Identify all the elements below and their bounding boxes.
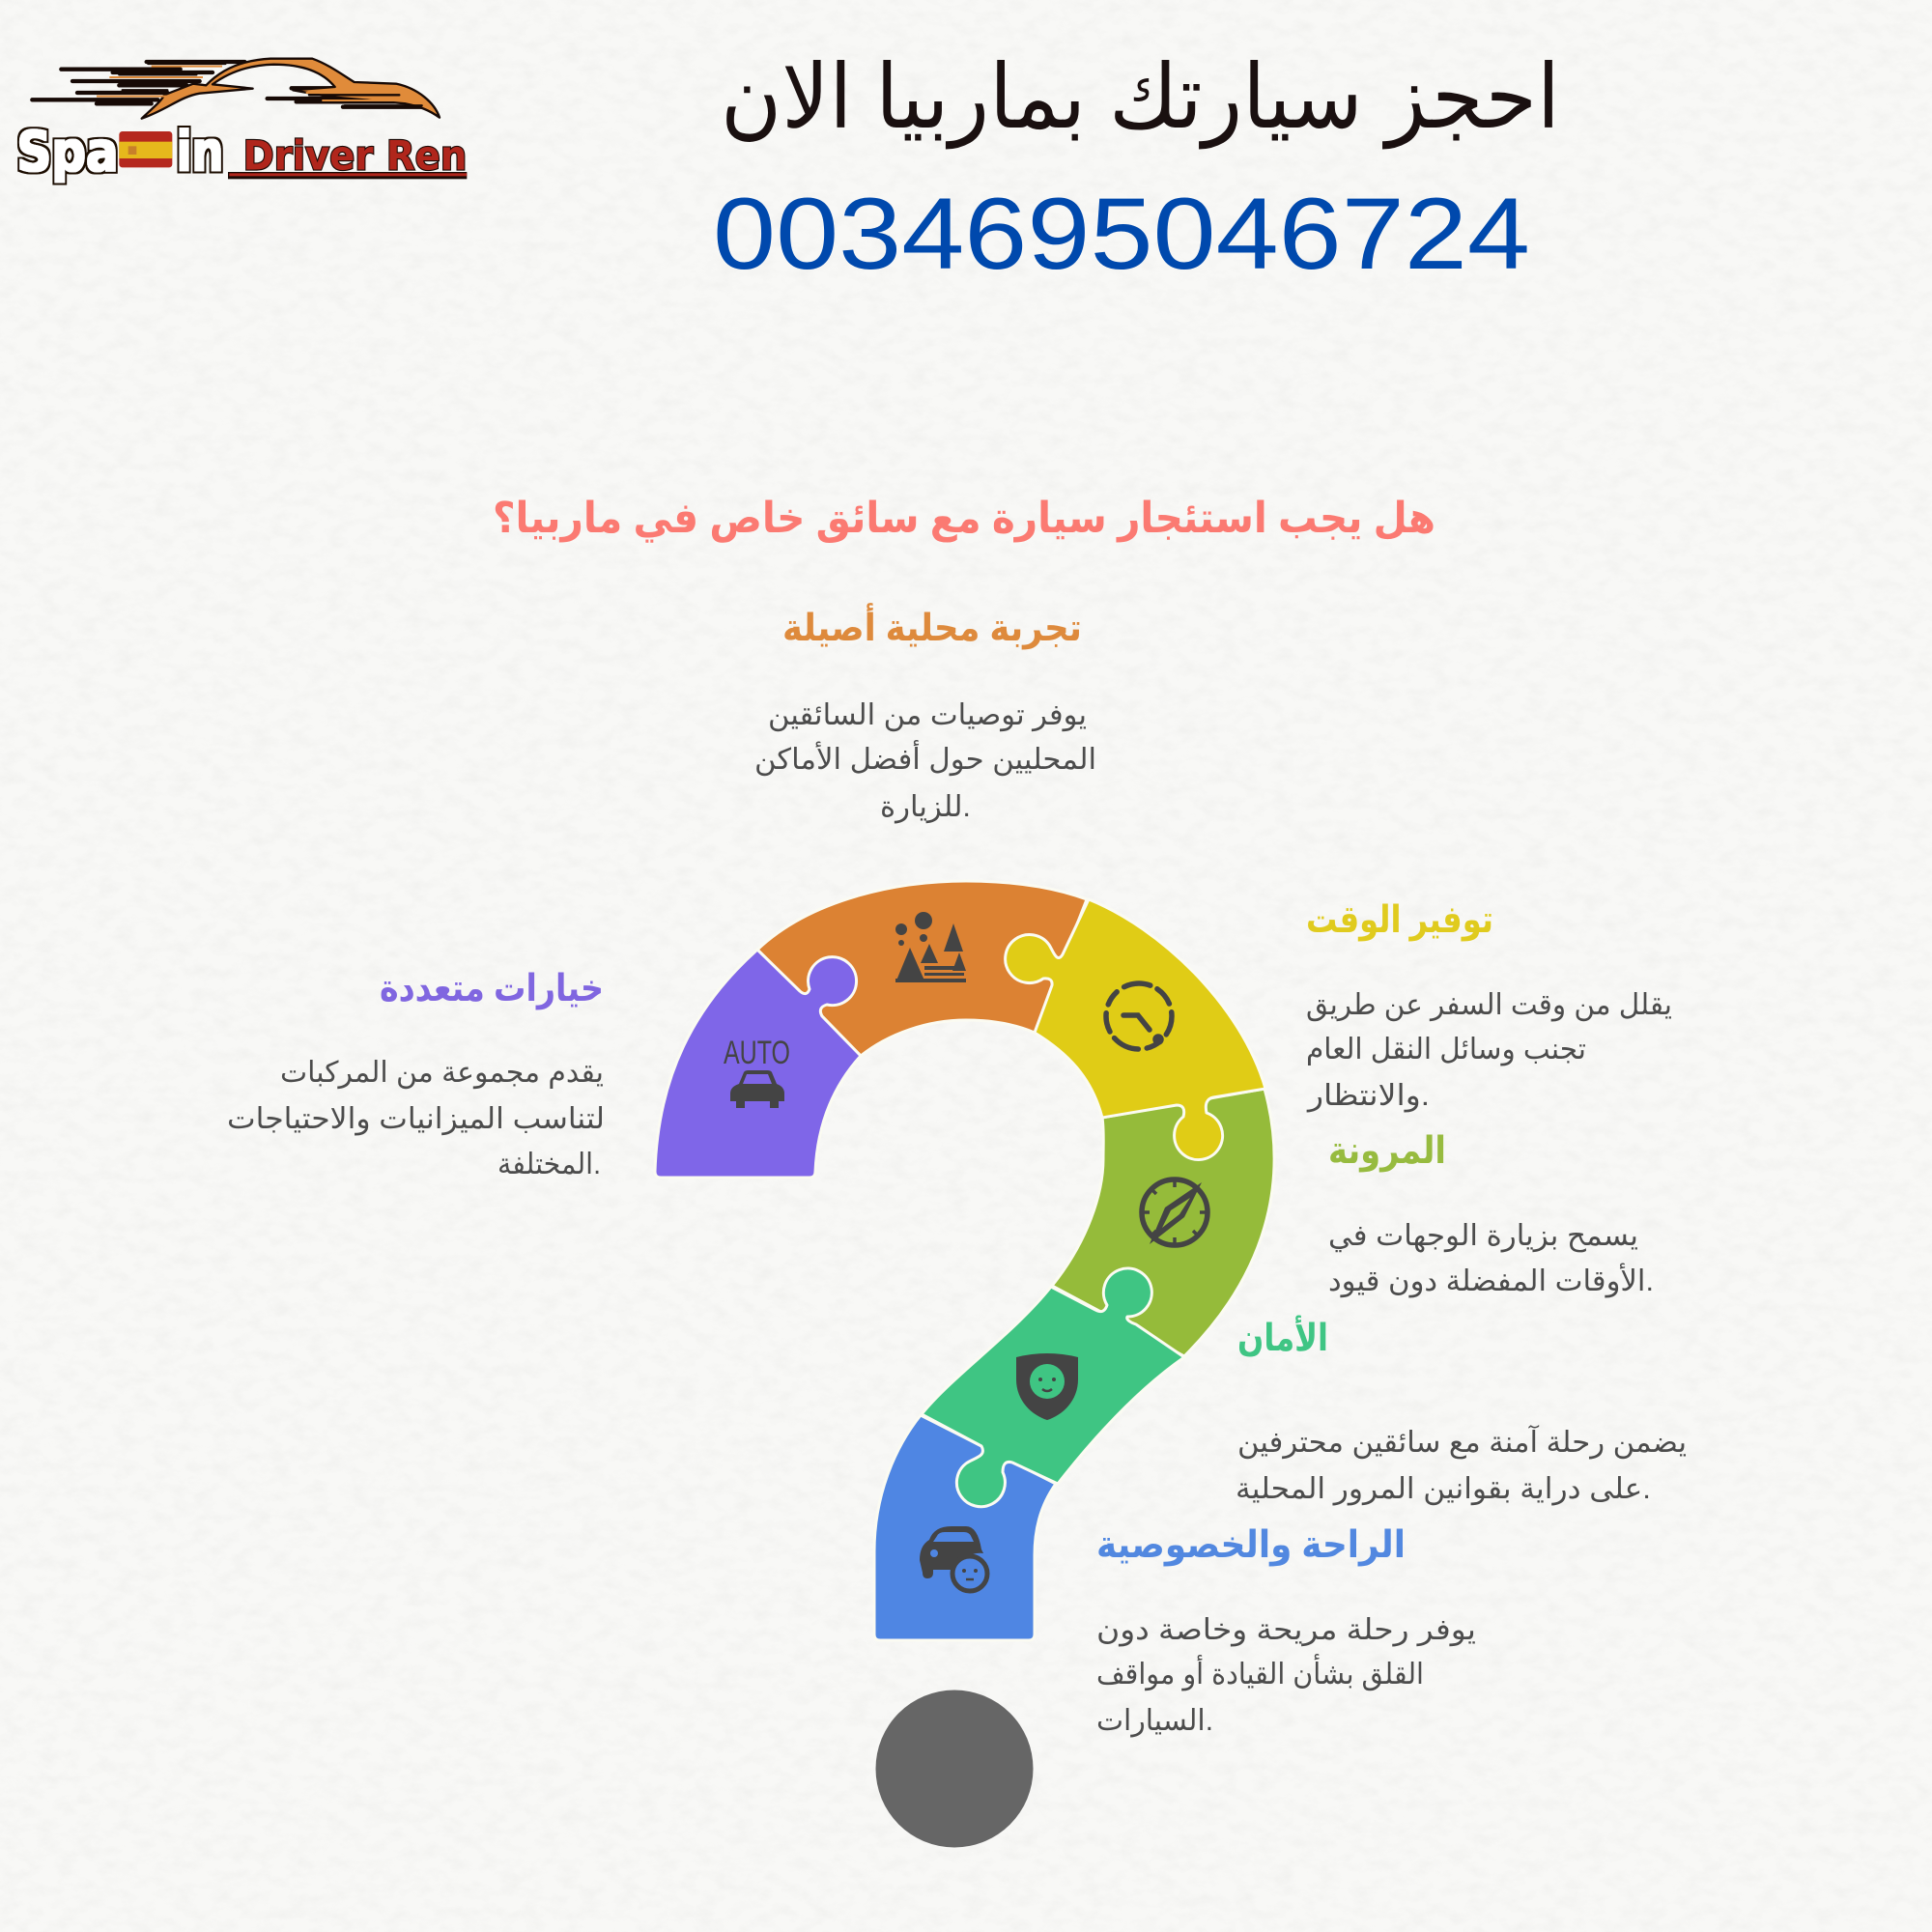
- text block: saving time: توفير الوقت: [1306, 899, 1493, 942]
- text block: multiple options: لتناسب الميزانيات والاحتياجات: [227, 1103, 605, 1136]
- logo: underline: [228, 172, 467, 179]
- logo: Spanish flag: [119, 131, 172, 167]
- logo: Spain Driver Rent: [16, 59, 467, 185]
- puzzle piece: teal: [922, 1268, 1184, 1507]
- text block: authentic local experience: تجربة محلية أصيلة: [782, 603, 1082, 650]
- logo: Driver Ren lettering: Driver Ren: [243, 131, 467, 179]
- puzzle piece: yellow: [1006, 899, 1265, 1160]
- text block: authentic local experience: المحليين حول أفضل الأماكن: [754, 739, 1096, 776]
- text block: safety: الأمان: [1237, 1314, 1328, 1359]
- text block: comfort and privacy: يوفر رحلة مريحة وخاصة دون: [1096, 1614, 1476, 1647]
- text block: flexibility: [1328, 1130, 1654, 1298]
- icon: auto car: [724, 1035, 790, 1108]
- question mark puzzle: [655, 881, 1274, 1640]
- question mark dot: [875, 1690, 1034, 1847]
- text block: multiple options: [227, 968, 605, 1180]
- icon: compass: [1142, 1179, 1208, 1245]
- text block: authentic local experience: يوفر توصيات من السائقين: [768, 699, 1087, 731]
- icon: clock: [1106, 983, 1172, 1049]
- icon: auto car: AUTO: [724, 1035, 790, 1071]
- puzzle piece: orange: [757, 881, 1087, 1056]
- text block: saving time: تجنب وسائل النقل العام: [1306, 1034, 1586, 1066]
- text block: multiple options: يقدم مجموعة من المركبات: [280, 1057, 604, 1089]
- header call to action: احجز سيارتك بماربيا الان: [721, 48, 1560, 150]
- text block: flexibility: المرونة: [1328, 1130, 1446, 1173]
- icon: landmarks and balloons: [895, 912, 966, 982]
- text block: flexibility: الأوقات المفضلة دون قيود.: [1328, 1262, 1654, 1298]
- text block: multiple options: المختلفة.: [497, 1149, 601, 1180]
- title: هل يجب استئجار سيارة مع سائق خاص في ماربيا؟: [493, 495, 1435, 543]
- text block: safety: على دراية بقوانين المرور المحلية.: [1236, 1473, 1651, 1506]
- text block: comfort and privacy: السيارات.: [1096, 1705, 1213, 1737]
- text block: safety: يضمن رحلة آمنة مع سائقين محترفين: [1237, 1425, 1687, 1460]
- logo: Spa lettering: Spa: [16, 120, 119, 185]
- text block: saving time: [1306, 899, 1672, 1113]
- icon: car with face: [920, 1526, 987, 1591]
- text block: authentic local experience: [754, 603, 1096, 823]
- phone number: 0034695046724: [713, 178, 1530, 291]
- puzzle piece: purple: [655, 950, 861, 1178]
- text block: authentic local experience: للزيارة.: [880, 791, 971, 823]
- icon: shield with face: [1016, 1353, 1078, 1420]
- text block: comfort and privacy: الراحة والخصوصية: [1096, 1524, 1406, 1567]
- logo: in lettering: in: [177, 120, 223, 185]
- text block: flexibility: يسمح بزيارة الوجهات في: [1328, 1220, 1638, 1253]
- text block: saving time: يقلل من وقت السفر عن طريق: [1306, 989, 1672, 1022]
- text block: saving time: والانتظار.: [1306, 1080, 1430, 1113]
- puzzle piece: blue: [874, 1415, 1056, 1640]
- text block: safety: [1236, 1314, 1687, 1506]
- text block: comfort and privacy: [1096, 1524, 1476, 1737]
- logo: car swoosh: [32, 59, 440, 119]
- text block: multiple options: خيارات متعددة: [380, 968, 604, 1010]
- text block: comfort and privacy: القلق بشأن القيادة أو مواقف: [1096, 1653, 1424, 1691]
- puzzle piece: green: [1052, 1089, 1274, 1356]
